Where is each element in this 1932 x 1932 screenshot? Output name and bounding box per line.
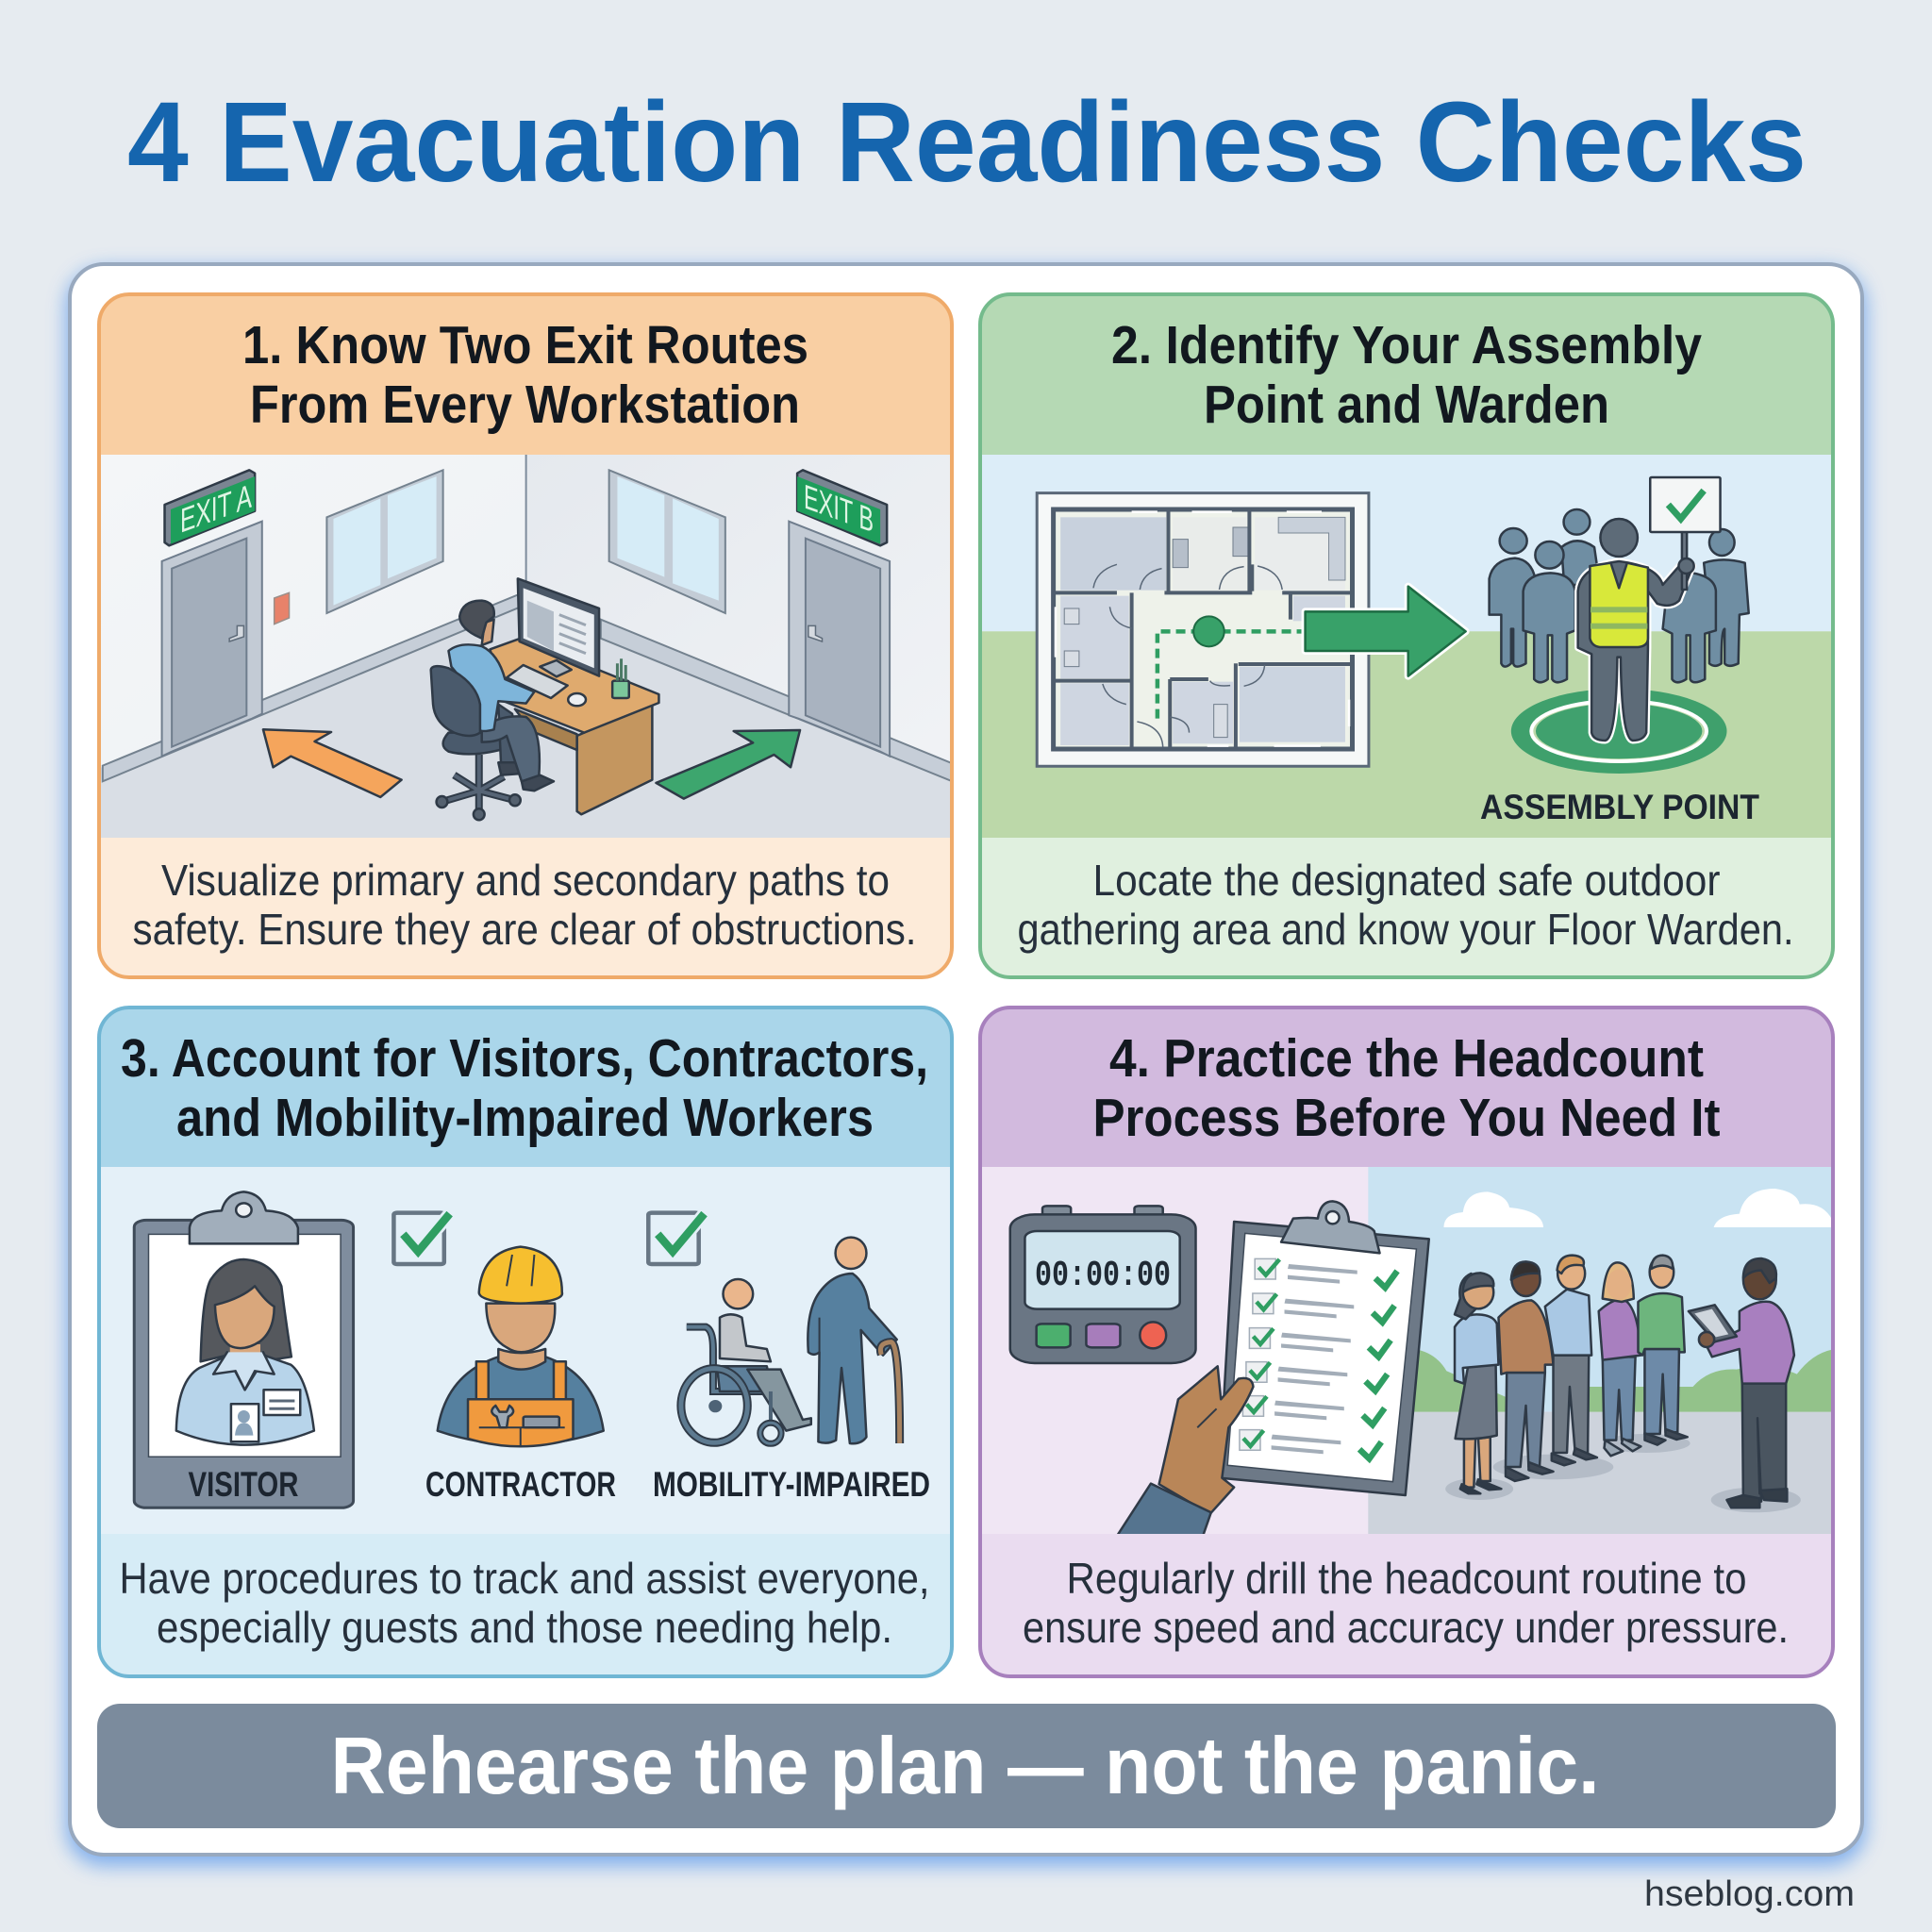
hand holding clipboard [1117,1366,1253,1536]
panel 2: assembly point [980,294,1857,977]
keyboard mouse and pen cup [507,658,629,706]
panel 1 description: Visualize primary and secondary paths to [161,856,890,905]
panel 3 heading: and Mobility-Impaired Workers [176,1088,874,1148]
panel 4 heading: Process Before You Need It [1092,1088,1721,1148]
arrow to assembly point [1306,587,1466,676]
panel 2 description [1017,856,1794,954]
panel 3 heading: 3. Account for Visitors, Contractors, [121,1028,928,1089]
illustration: three person types [94,1160,980,1538]
person type labels: MOBILITY-IMPAIRED [653,1465,930,1504]
floor plan [1037,493,1369,766]
door B [789,522,890,757]
person with cane [808,1238,900,1443]
illustration: timer clipboard and drill [981,1160,1861,1538]
woman in purple [1599,1262,1641,1456]
man in green [1638,1256,1688,1445]
panel 1 description [132,856,917,954]
background group of people [1490,509,1749,682]
fire alarm [275,592,290,625]
panel 1 header background [99,294,952,455]
man in blue shirt [1545,1256,1597,1465]
man in brown sweater [1498,1261,1554,1481]
banner [97,1704,1836,1828]
exit signs [165,470,255,545]
panel 1: two exit routes [94,294,980,977]
main white card [66,264,1866,1866]
illustration: floor plan to assembly point [981,453,1857,839]
wheelchair user [681,1279,811,1443]
checklist clipboard [1219,1201,1429,1495]
panel 4 header background [980,1008,1833,1167]
source credit: hseblog.com [1644,1874,1855,1914]
panel 2 description: Locate the designated safe outdoor [1092,856,1721,905]
title: 4 Evacuation Readiness Checks [127,77,1807,206]
window left [326,470,443,613]
person type labels: VISITOR [189,1465,298,1504]
panel 3 description: especially guests and those needing help. [157,1603,892,1652]
panel 1 heading: From Every Workstation [250,375,800,435]
panel 3 heading [121,1028,928,1148]
seated worker [431,601,554,791]
panel 2 heading: Point and Warden [1204,375,1609,435]
panel 1 heading [242,315,808,435]
arrow: orange route [263,729,402,797]
stopwatch [1010,1206,1196,1363]
leader with tablet [1689,1258,1794,1507]
panel 4: headcount practice [980,1008,1861,1676]
contractor person [438,1247,604,1446]
illustration: office with two exits [94,453,980,840]
ground shadows [1445,1434,1801,1512]
visitor person [176,1259,314,1445]
window right [609,470,725,613]
assembly point label: ASSEMBLY POINT [1480,788,1759,826]
panel 4 description: ensure speed and accuracy under pressure. [1023,1603,1789,1652]
panel 4 description [1023,1554,1789,1652]
panel 4 heading: 4. Practice the Headcount [1109,1028,1704,1089]
arrow: green route [657,730,800,799]
panel 2 header background [980,294,1833,455]
panel 2 description: gathering area and know your Floor Warden. [1017,905,1794,954]
panel 3 description: Have procedures to track and assist everyone, [119,1554,930,1603]
chair base [437,755,521,820]
panel 2 heading: 2. Identify Your Assembly [1111,315,1702,375]
warden with vest and sign [1578,477,1721,741]
panel 4 heading [1092,1028,1721,1148]
panel 2 heading [1111,315,1702,435]
assembly ring [1511,689,1727,774]
stopwatch digits: 00:00:00 [1035,1256,1171,1296]
exit B sign label: EXIT B [804,476,874,540]
door A [162,522,262,757]
computer monitor [518,578,599,676]
woman in skirt [1455,1273,1501,1493]
panel 3: visitors contractors mobility-impaired [94,1008,980,1676]
checkbox mobility [648,1213,705,1264]
person type labels [189,1465,930,1504]
panel 4 description: Regularly drill the headcount routine to [1066,1554,1747,1603]
panel 3 description [119,1554,930,1652]
banner text: Rehearse the plan — not the panic. [330,1722,1600,1811]
exit A sign label: EXIT A [180,475,252,541]
checkbox contractor [393,1213,450,1264]
clouds [1443,1189,1835,1227]
person type labels: CONTRACTOR [425,1465,616,1504]
panel 1 description: safety. Ensure they are clear of obstructions. [132,905,917,954]
bushes [1414,1349,1835,1412]
visitor clipboard [134,1191,354,1507]
panel 3 header background [99,1008,952,1167]
panel 1 heading: 1. Know Two Exit Routes [242,315,808,375]
desk [490,639,658,814]
